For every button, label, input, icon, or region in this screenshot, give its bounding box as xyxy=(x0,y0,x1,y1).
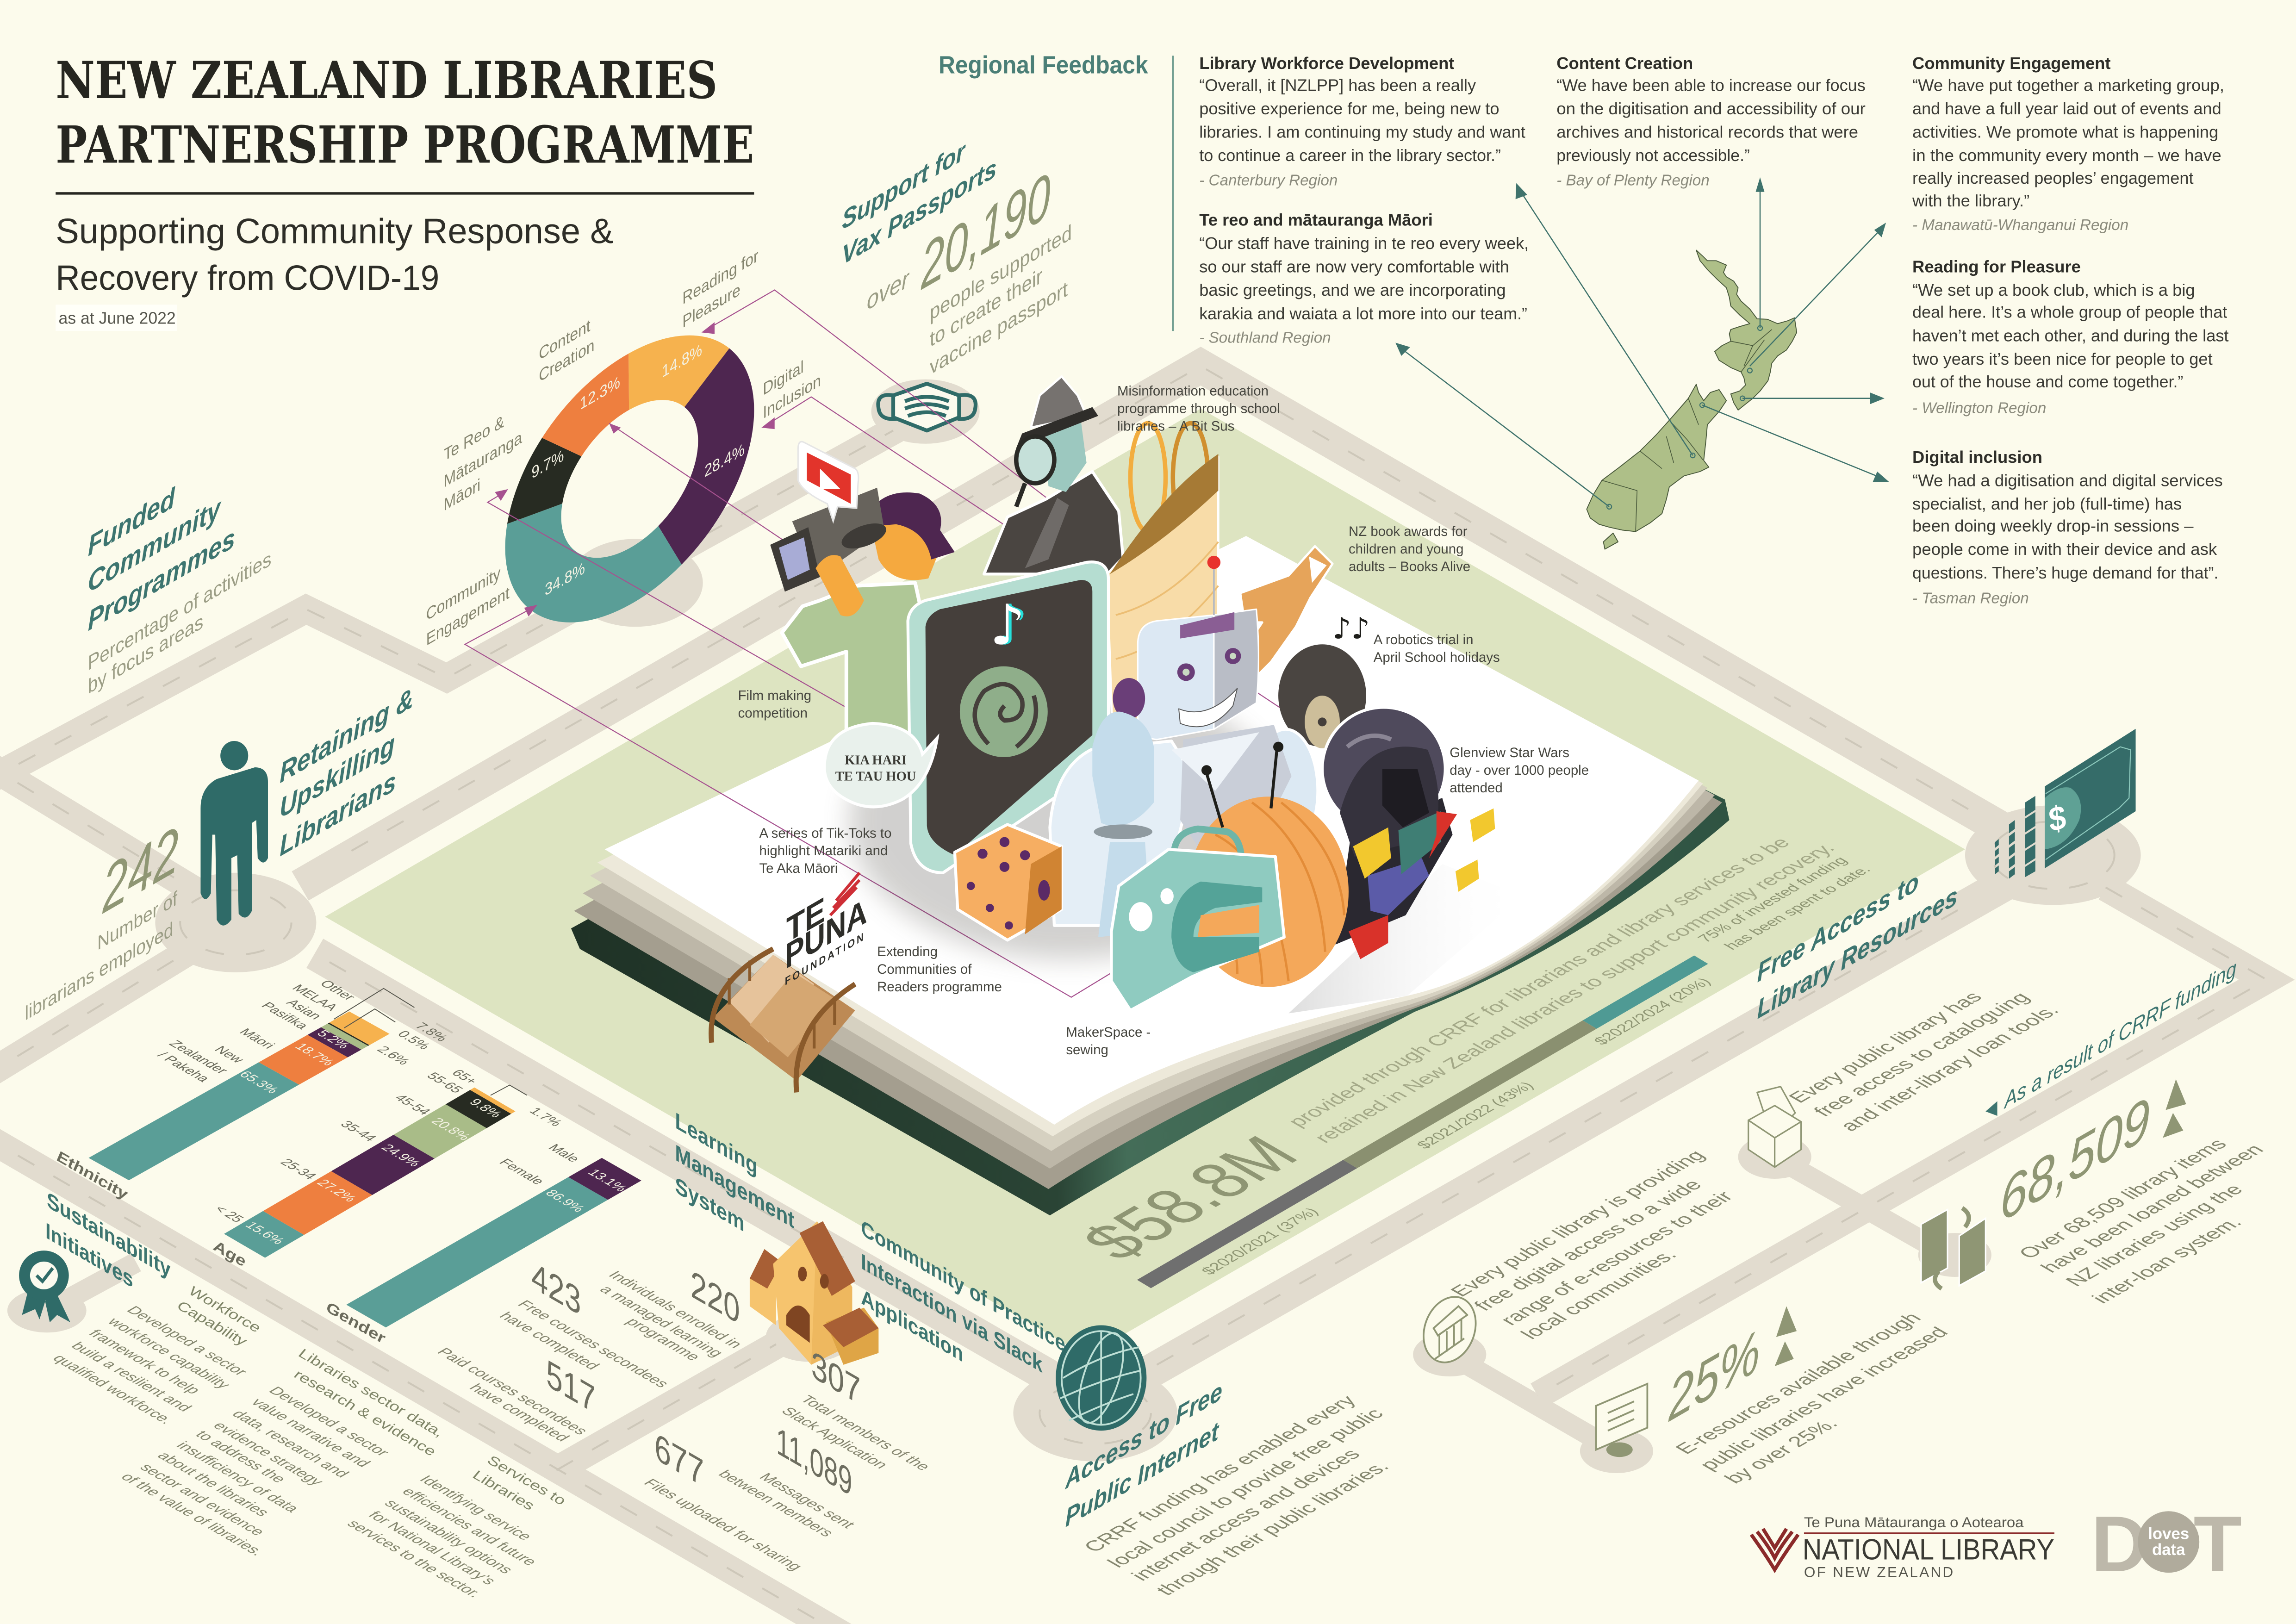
funding total and description xyxy=(1066,834,1875,1270)
illustration: dice xyxy=(955,824,1062,940)
sustainability: sector data: about the libraries xyxy=(154,1450,274,1518)
access to free public internet: Public Internet xyxy=(1065,1415,1220,1533)
feedback quote: te reo: so our staff are now very comfortable with xyxy=(1199,257,1509,276)
stat: cataloguing access: Every public library has xyxy=(1784,989,1987,1106)
stat: digital access: Every public library is providing xyxy=(1446,1147,1710,1300)
age stacked bar: 1.7% xyxy=(526,1106,565,1128)
illustration labels: libraries – A Bit Sus xyxy=(1117,418,1234,434)
donut category labels: Te Reo & xyxy=(444,411,504,465)
age stacked bar: 45-54 xyxy=(391,1093,434,1117)
feedback quote: community engagement xyxy=(1912,54,2224,234)
sustainability initiatives heading: Sustainability xyxy=(47,1187,171,1283)
community of practice interaction via slack: between members xyxy=(715,1468,838,1539)
ethnicity stacked bar: Māori xyxy=(236,1027,278,1051)
retaining and upskilling librarians: Upskilling xyxy=(280,727,395,825)
feedback quote: te reo: karakia and waiata a lot more into our team.” xyxy=(1199,304,1527,323)
icon: ribbon badge xyxy=(19,1251,70,1322)
learning management system: Paid courses secondees xyxy=(434,1345,592,1437)
retaining and upskilling librarians: 242 xyxy=(102,811,179,928)
gender stacked bar xyxy=(324,1142,641,1347)
illustration labels: children and young xyxy=(1349,541,1463,557)
feedback quote: digital inclusion: - Tasman Region xyxy=(1912,590,2029,607)
feedback quote: community engagement: and have a full year laid out of events and xyxy=(1912,99,2221,118)
ethnicity stacked bar: / Pakeha xyxy=(154,1050,213,1084)
feedback quote: digital inclusion: Digital inclusion xyxy=(1912,448,2042,467)
stat: inter-loan items: have been loaned between xyxy=(2036,1141,2269,1276)
arrows from map to quotes xyxy=(1395,177,1889,507)
illustration: soft shadow xyxy=(849,681,1288,959)
community of practice interaction via slack: Application xyxy=(861,1284,963,1367)
stat: e-resources increase: public libraries have increased xyxy=(1695,1324,1953,1473)
illustration labels: A series of Tik-Toks to xyxy=(759,826,891,841)
donut percentage labels: 28.4% xyxy=(704,439,745,481)
community of practice interaction via slack: Interaction via Slack xyxy=(861,1249,1043,1378)
feedback quote: community engagement: - Manawatū-Whanganui Region xyxy=(1912,217,2128,234)
ethnicity stacked bar: Asian xyxy=(283,997,325,1021)
funding total and description: has been spent to date. xyxy=(1721,863,1875,952)
feedback quote: content creation xyxy=(1556,54,1866,189)
logo: national library of new zealand: NATIONAL LIBRARY xyxy=(1803,1534,2054,1566)
illustration labels: A robotics trial in xyxy=(1374,632,1473,647)
illustration labels: highlight Matariki and xyxy=(759,843,888,859)
funding total and description: $58.8M xyxy=(1066,1126,1315,1270)
te puna foundation logo: TE xyxy=(786,889,825,951)
age stacked bar: 20.8% xyxy=(428,1116,473,1142)
feedback quote: community engagement: Community Engagement xyxy=(1912,54,2111,73)
access to free public internet xyxy=(1064,1375,1394,1599)
icon: filing box xyxy=(1748,1087,1801,1167)
community of practice interaction via slack: 677 xyxy=(654,1425,704,1495)
ethnicity stacked bar: Zealander xyxy=(166,1038,231,1076)
feedback quote: te reo: - Southland Region xyxy=(1199,329,1331,346)
donut category labels: Pleasure xyxy=(682,279,740,332)
illustration labels: Extending xyxy=(877,944,938,959)
access to free public internet: local council to provide free public xyxy=(1102,1406,1388,1571)
age stacked bar: 27.2% xyxy=(313,1177,360,1204)
feedback quote: reading for pleasure: - Wellington Region xyxy=(1912,399,2046,417)
purple leader lines xyxy=(465,290,1346,997)
support for vax passports: 20,190 xyxy=(921,158,1051,304)
icon: person xyxy=(200,741,268,926)
ethnicity stacked bar: MELAA xyxy=(289,983,341,1013)
icon: monitor document xyxy=(1596,1384,1647,1457)
feedback quote: content creation: archives and historical records that were xyxy=(1556,123,1858,142)
learning management system: 423 xyxy=(531,1253,581,1324)
illustration labels: sewing xyxy=(1066,1042,1108,1058)
funded community programmes heading: Community xyxy=(88,491,221,599)
ethnicity stacked bar: Other xyxy=(317,978,359,1002)
funded community programmes heading xyxy=(88,481,271,699)
community of practice interaction via slack: Files uploaded for sharing xyxy=(640,1476,807,1573)
feedback quote: content creation: previously not accessible.” xyxy=(1556,146,1750,165)
green floor under book xyxy=(325,409,1965,1356)
stat: digital access: local communities. xyxy=(1516,1246,1682,1342)
stat: cataloguing access: and inter-library loan tools. xyxy=(1835,1002,2064,1134)
illustration: coloured toy bricks xyxy=(1349,809,1495,959)
funded community programmes heading: Funded xyxy=(88,481,175,562)
stat: inter-loan items: 68,509 xyxy=(2000,1083,2150,1235)
support for vax passports xyxy=(842,135,1072,380)
donut category labels: Reading for xyxy=(682,245,759,308)
community of practice interaction via slack: Messages sent xyxy=(756,1470,859,1531)
support for vax passports: people supported xyxy=(930,219,1072,325)
donut percentage labels: 34.8% xyxy=(545,558,585,600)
illustration: phone with tiktok and koru: ♪ xyxy=(993,593,1028,658)
age stacked bar: 24.9% xyxy=(378,1142,424,1169)
donut category labels: Creation xyxy=(539,335,594,386)
learning management system: a managed learning xyxy=(596,1283,728,1359)
funding timeline bar: $2022/2024 (20%) xyxy=(1590,976,1715,1047)
open book xyxy=(571,536,1730,1215)
stat: e-resources increase: 25% xyxy=(1668,1316,1760,1435)
icon: face mask xyxy=(878,384,976,430)
retaining and upskilling librarians xyxy=(25,681,414,1025)
illustration labels: NZ book awards for xyxy=(1349,524,1468,539)
age stacked bar: 65+ xyxy=(448,1068,481,1086)
gender stacked bar: Female xyxy=(496,1157,548,1187)
community of practice interaction via slack: 11,089 xyxy=(776,1419,852,1505)
feedback quote: reading for pleasure: haven’t met each other, and during the last xyxy=(1912,326,2228,345)
feedback quote: library workforce development: - Canterbury Region xyxy=(1199,172,1338,189)
illustration labels: Misinformation education xyxy=(1117,383,1269,398)
access to free public internet: internet access and devices xyxy=(1126,1446,1365,1584)
learning management system: Individuals enrolled in xyxy=(605,1269,747,1350)
illustration labels: Te Aka Māori xyxy=(759,861,838,876)
donut category labels: Engagement xyxy=(426,582,510,649)
donut percentage labels: 14.8% xyxy=(662,340,702,381)
illustration labels xyxy=(738,383,1589,1058)
illustration: darth vader helmet xyxy=(1322,707,1453,945)
support for vax passports: Vax Passports xyxy=(842,152,996,271)
stat: digital access: range of e-resources to their xyxy=(1495,1188,1738,1328)
title: PARTNERSHIP PROGRAMME xyxy=(56,115,754,175)
feedback quote: content creation: Content Creation xyxy=(1556,54,1693,73)
donut category labels: Content xyxy=(539,315,591,364)
purple leader arrowheads xyxy=(495,322,775,616)
road network xyxy=(0,366,2267,1624)
gender stacked bar: 13.1% xyxy=(585,1167,630,1194)
illustration labels: programme through school xyxy=(1117,401,1280,416)
learning management system: 220 xyxy=(691,1262,740,1333)
title: NEW ZEALAND LIBRARIES xyxy=(56,50,717,111)
subtitle: Supporting Community Response & xyxy=(56,212,614,251)
feedback quote: digital inclusion xyxy=(1912,448,2223,607)
free access to library resources: Free Access to xyxy=(1757,866,1919,989)
stat: inter-loan items xyxy=(2000,1079,2269,1307)
funding total and description: provided through CRRF for librarians and library services to be xyxy=(1283,834,1795,1130)
map of New Zealand xyxy=(1587,250,1797,549)
illustration: vinyl head with music notes xyxy=(1278,611,1370,748)
retaining and upskilling librarians: Number of xyxy=(97,887,177,955)
learning management system: Management xyxy=(675,1140,794,1234)
feedback quote: digital inclusion: specialist, and her job (full-time) has xyxy=(1912,494,2182,513)
age stacked bar: 9.8% xyxy=(466,1097,505,1120)
community of practice interaction via slack xyxy=(640,1215,1065,1573)
feedback quote: reading for pleasure: deal here. It’s a whole group of people that xyxy=(1912,303,2227,322)
feedback quote: library workforce development: positive experience for me, being new to xyxy=(1199,99,1500,118)
regional feedback heading: Regional Feedback xyxy=(939,51,1148,79)
stat: inter-loan items: inter-loan system. xyxy=(2087,1214,2247,1307)
feedback quote: reading for pleasure: Reading for Pleasure xyxy=(1912,257,2081,276)
learning management system: 517 xyxy=(546,1351,596,1422)
donut percentage labels: 12.3% xyxy=(580,372,620,414)
feedback quote: reading for pleasure: “We set up a book club, which is a big xyxy=(1912,280,2195,299)
ethnicity stacked bar: Pasifika xyxy=(258,1000,312,1032)
age stacked bar: < 25 xyxy=(211,1204,247,1225)
sustainability: workforce capability: Capability xyxy=(174,1298,250,1349)
feedback quote: reading for pleasure: out of the house and come together.” xyxy=(1912,372,2183,391)
illustration: vinyl head with music notes: ♪♪ xyxy=(1332,611,1370,646)
support for vax passports: Support for xyxy=(842,135,966,236)
retaining and upskilling librarians: Librarians xyxy=(280,765,396,863)
logo: dot loves data: T xyxy=(2194,1500,2242,1588)
logo: national library of new zealand: OF NEW ZEALAND xyxy=(1804,1564,1954,1580)
illustration: sewing machine xyxy=(1111,829,1284,1010)
feedback quote: community engagement: with the library.” xyxy=(1912,191,2029,210)
subtitle: Recovery from COVID-19 xyxy=(56,259,439,298)
feedback quote: library workforce development: “Overall, it [NZLPP] has been a really xyxy=(1199,75,1476,94)
feedback quote: community engagement: “We have put together a marketing group, xyxy=(1912,75,2224,94)
sustainability: workforce capability: Workforce xyxy=(186,1284,264,1335)
icon: money note: $ xyxy=(2047,797,2067,839)
sustainability: workforce capability: workforce capability xyxy=(104,1315,235,1391)
logo: national library of new zealand xyxy=(1751,1514,2054,1580)
support for vax passports: to create their xyxy=(930,263,1042,352)
sustainability: sector data: evidence strategy xyxy=(210,1419,328,1487)
sustainability: sector data: to address the xyxy=(192,1428,290,1485)
sustainability: services to libraries: efficiencies and future xyxy=(398,1485,541,1568)
funding timeline bar: $2020/2021 (37%) xyxy=(1198,1206,1322,1277)
donut category labels: Mātauranga xyxy=(444,427,523,492)
donut category labels: Digital xyxy=(763,356,804,399)
sustainability: sector data: Libraries sector data, xyxy=(295,1346,447,1440)
illustration: kia hari speech bubble xyxy=(824,723,937,807)
gender stacked bar: Male xyxy=(545,1142,583,1164)
sustainability: services to libraries: sustainability options xyxy=(381,1497,517,1576)
icon: library building xyxy=(1415,1289,1485,1370)
sustainability: services to libraries: Libraries xyxy=(469,1468,538,1513)
feedback quote: te reo: Te reo and mātauranga Māori xyxy=(1199,210,1433,229)
stat: inter-loan items: Over 68,509 library items xyxy=(2014,1136,2232,1262)
stat: e-resources increase: E-resources available through xyxy=(1671,1310,1926,1457)
illustration: wooden bridge xyxy=(711,949,855,1092)
age stacked bar: 25-34 xyxy=(277,1157,319,1182)
funding total and description: retained in New Zealand libraries to support community recovery. xyxy=(1310,840,1840,1146)
illustration: spy with magnifying glass xyxy=(984,376,1125,574)
sustainability: workforce capability: framework to help xyxy=(85,1327,205,1396)
feedback quote: library workforce development xyxy=(1199,54,1525,189)
te puna foundation logo: FOUNDATION xyxy=(785,930,865,988)
illustration labels: Readers programme xyxy=(877,979,1002,995)
illustration labels: Communities of xyxy=(877,962,972,977)
feedback quote: content creation: on the digitisation and accessibility of our xyxy=(1556,99,1866,118)
funded community programmes heading: Programmes xyxy=(88,521,235,637)
feedback quote: digital inclusion: people come in with their device and ask xyxy=(1912,540,2217,559)
learning management system xyxy=(434,1108,794,1444)
feedback quote: te reo xyxy=(1199,210,1529,346)
sustainability: services to libraries: Identifying service xyxy=(416,1473,536,1543)
sustainability: services to libraries: services to the sector. xyxy=(343,1518,486,1599)
feedback quote: digital inclusion: been doing weekly drop-in sessions – xyxy=(1912,516,2194,535)
illustration: phone with tiktok and koru xyxy=(908,562,1108,873)
logo: dot loves data: D xyxy=(2091,1500,2148,1588)
feedback quote: library workforce development: to continue a career in the library sector.” xyxy=(1199,146,1501,165)
sustainability: sector data: value narrative and xyxy=(248,1396,374,1469)
title xyxy=(56,50,754,195)
funding timeline bar: $2021/2022 (43%) xyxy=(1413,1080,1537,1151)
age stacked bar: 35-44 xyxy=(337,1119,380,1144)
illustration: orange bird and books xyxy=(1240,546,1332,677)
sustainability: workforce capability: build a resilient and xyxy=(68,1339,196,1414)
illustration labels: day - over 1000 people xyxy=(1450,763,1589,778)
illustration labels: competition xyxy=(738,705,808,721)
illustration: ball of yarn with needles xyxy=(1188,742,1349,987)
support for vax passports: over xyxy=(867,264,909,316)
illustration labels: attended xyxy=(1450,780,1503,796)
ethnicity stacked bar: New xyxy=(211,1044,248,1065)
donut category labels: Inclusion xyxy=(763,370,821,423)
ethnicity stacked bar: 0.5% xyxy=(394,1029,434,1052)
illustration: woven bag xyxy=(1107,423,1218,747)
learning management system: programme xyxy=(622,1315,705,1363)
funded community programmes heading: by focus areas xyxy=(88,610,203,699)
sustainability: workforce capability: qualified workforce. xyxy=(49,1352,178,1426)
learning management system: Free courses secondees xyxy=(514,1298,673,1390)
learning management system: have completed xyxy=(496,1309,604,1372)
sustainability: services to libraries: for National Library’s xyxy=(365,1509,500,1587)
illustration labels: adults – Books Alive xyxy=(1349,559,1470,574)
icon: video play speech bubble xyxy=(798,442,859,521)
te puna foundation logo: PUNA xyxy=(785,890,867,977)
sustainability: sector data xyxy=(117,1346,447,1558)
illustration: kia hari speech bubble: TE TAU HOU xyxy=(835,769,916,784)
stat: inter-loan items: NZ libraries using the xyxy=(2061,1181,2248,1289)
sustainability: sector data: research & evidence xyxy=(291,1367,439,1459)
subtitle: as at June 2022 xyxy=(59,308,176,327)
donut category labels xyxy=(426,245,821,649)
logo: dot loves data xyxy=(2091,1500,2242,1588)
feedback quote: community engagement: in the community every month – we have xyxy=(1912,146,2221,165)
sustainability: services to libraries xyxy=(343,1453,569,1599)
illustration labels: MakerSpace - xyxy=(1066,1025,1151,1040)
age stacked bar: Age xyxy=(211,1237,249,1270)
feedback quote: community engagement: activities. We promote what is happening xyxy=(1912,123,2218,142)
donut percentage labels: 9.7% xyxy=(531,445,564,483)
support for vax passports: vaccine passport xyxy=(930,276,1068,380)
learning management system: System xyxy=(675,1172,745,1237)
ethnicity stacked bar: 5.2% xyxy=(313,1028,353,1051)
feedback quote: content creation: “We have been able to increase our focus xyxy=(1556,75,1866,94)
community of practice interaction via slack: Total members of the xyxy=(796,1393,934,1473)
logo: dot loves data: data xyxy=(2152,1541,2185,1559)
access to free public internet: through their public libraries. xyxy=(1151,1458,1394,1599)
age stacked bar: 15.6% xyxy=(242,1220,287,1246)
illustration labels: Glenview Star Wars xyxy=(1450,745,1569,760)
sustainability: services to libraries: Services to xyxy=(484,1453,569,1508)
logo: dot loves data: loves xyxy=(2148,1524,2189,1543)
stat: digital access: free digital access to a wide xyxy=(1469,1176,1707,1314)
as a result of CRRF funding: As a result of CRRF funding xyxy=(2004,955,2236,1114)
feedback quote: reading for pleasure xyxy=(1912,257,2228,417)
funded community programmes heading: Percentage of activities xyxy=(88,547,271,675)
icon: book exchange xyxy=(1921,1208,1985,1288)
ethnicity stacked bar: 2.6% xyxy=(373,1044,413,1067)
learning management system: Learning xyxy=(675,1108,758,1180)
ethnicity stacked bar: Ethnicity xyxy=(55,1148,131,1203)
free access to library resources: Library Resources xyxy=(1757,880,1958,1025)
illustration: kia hari speech bubble: KIA HARI xyxy=(845,753,907,768)
retaining and upskilling librarians: Retaining & xyxy=(280,681,414,790)
retaining and upskilling librarians: librarians employed xyxy=(25,917,173,1025)
feedback quote: digital inclusion: “We had a digitisation and digital services xyxy=(1912,471,2223,490)
illustration: robot xyxy=(1050,556,1318,937)
ethnicity stacked bar: 65.3% xyxy=(236,1069,282,1095)
icon: money note xyxy=(1995,729,2136,878)
donut category labels: Community xyxy=(426,563,501,625)
feedback quote: reading for pleasure: two years it’s been nice for people to get xyxy=(1912,349,2213,368)
sustainability: sector data: insufficiency of data xyxy=(173,1439,304,1514)
access to free public internet: CRRF funding has enabled every xyxy=(1079,1392,1361,1555)
feedback quote: content creation: - Bay of Plenty Region xyxy=(1556,172,1710,189)
illustration: film maker with camera xyxy=(770,488,955,747)
sustainability: sector data: data, research and xyxy=(229,1407,353,1480)
sustainability: sector data: of the value of libraries. xyxy=(117,1470,268,1558)
feedback quote: te reo: “Our staff have training in te reo every week, xyxy=(1199,234,1529,253)
stat: e-resources increase: by over 25%. xyxy=(1719,1415,1843,1487)
feedback quote: digital inclusion: questions. There’s huge demand for that”. xyxy=(1912,563,2218,582)
age stacked bar xyxy=(211,1068,565,1270)
gender stacked bar: Gender xyxy=(324,1299,388,1347)
feedback quote: library workforce development: libraries. I am continuing my study and want xyxy=(1199,123,1525,142)
community of practice interaction via slack: Slack Application xyxy=(778,1405,892,1471)
sustainability: sector data: sector and evidence xyxy=(137,1461,269,1538)
community of practice interaction via slack: 307 xyxy=(811,1343,861,1413)
sustainability initiatives heading: Initiatives xyxy=(45,1218,133,1293)
ethnicity stacked bar: 7.8% xyxy=(411,1021,451,1044)
illustration labels: Film making xyxy=(738,688,811,703)
ethnicity stacked bar: 18.7% xyxy=(292,1041,337,1068)
feedback quote: library workforce development: Library Workforce Development xyxy=(1199,54,1454,73)
funding timeline bar xyxy=(1137,956,1715,1288)
subtitle xyxy=(56,212,614,331)
learning management system: have completed xyxy=(466,1381,574,1444)
sustainability: sector data: Developed a sector xyxy=(265,1384,393,1458)
gender stacked bar: 86.9% xyxy=(542,1188,588,1214)
sustainability: workforce capability xyxy=(49,1284,264,1426)
community of practice interaction via slack: Community of Practice xyxy=(861,1215,1065,1357)
ethnicity stacked bar xyxy=(55,978,451,1203)
feedback quote: community engagement: really increased peoples’ engagement xyxy=(1912,168,2194,187)
donut chart xyxy=(533,328,726,630)
sustainability: workforce capability: Developed a sector xyxy=(123,1304,252,1378)
donut percentage labels xyxy=(531,340,745,600)
access to free public internet: Access to Free xyxy=(1064,1375,1222,1495)
feedback quote: te reo: basic greetings, and we are incorporating xyxy=(1199,280,1506,299)
funding total and description: 75% of invested funding xyxy=(1694,854,1851,945)
illustration labels: April School holidays xyxy=(1374,650,1500,665)
icon: globe xyxy=(1056,1325,1146,1431)
illustration: phone with tiktok and koru: ♪ xyxy=(989,593,1025,658)
donut category labels: Māori xyxy=(444,474,480,515)
icon: house xyxy=(750,1221,878,1365)
logo: national library of new zealand: Te Puna Mātauranga o Aotearoa xyxy=(1804,1514,2024,1531)
age stacked bar: 55-65 xyxy=(423,1070,466,1095)
stat: cataloguing access: free access to cataloguing xyxy=(1809,989,2035,1120)
